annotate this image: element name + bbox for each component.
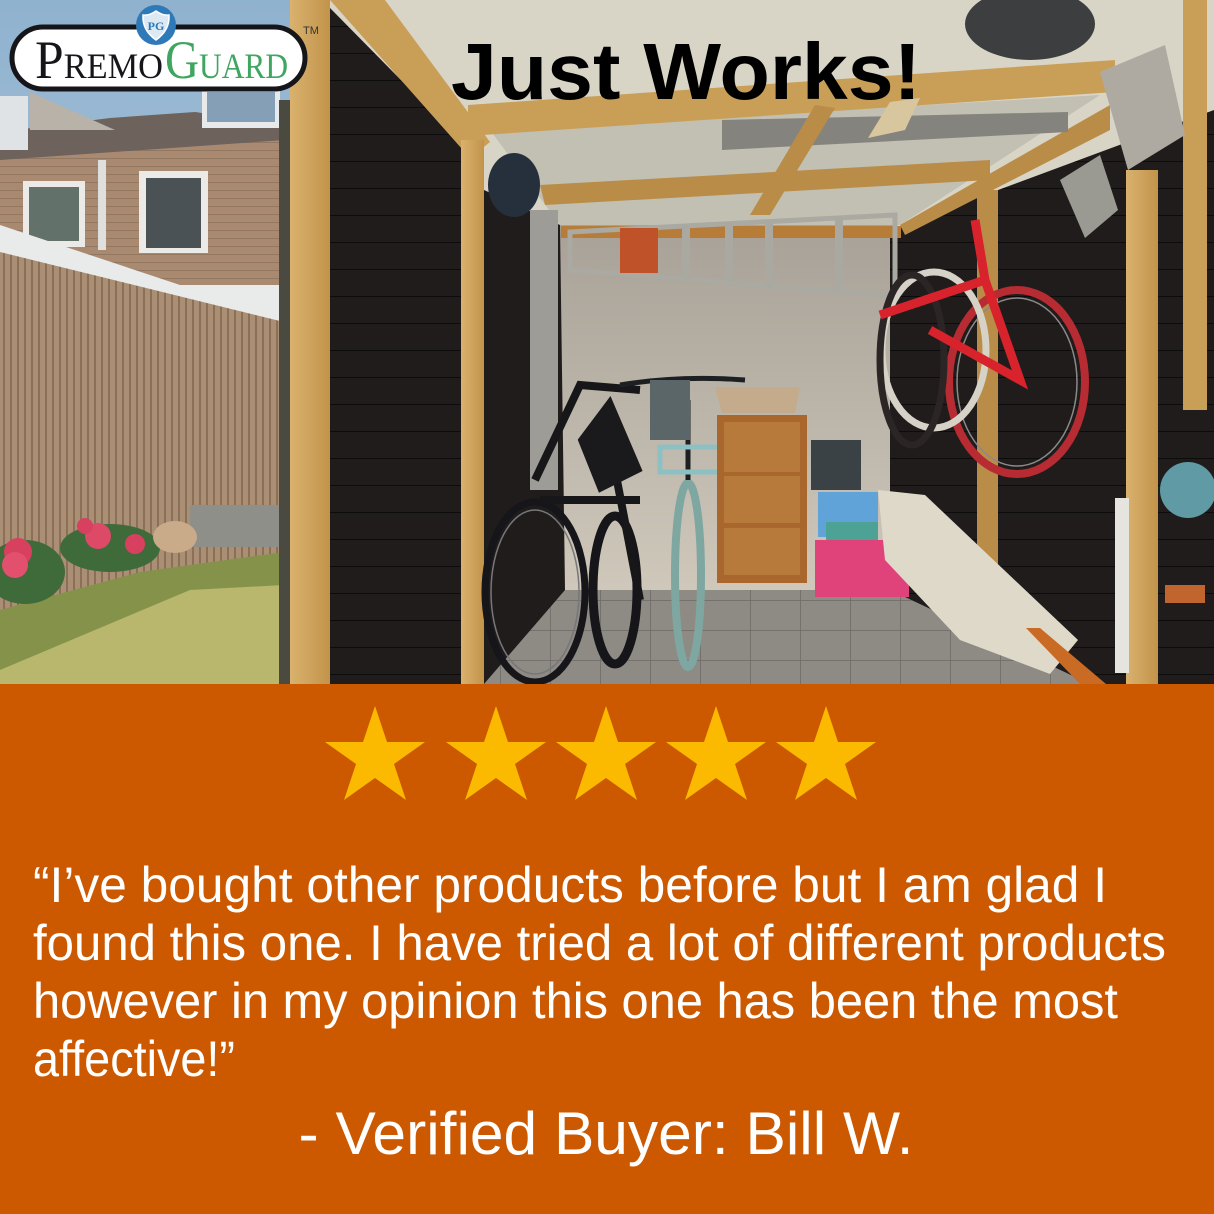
review quote: found this one. I have tried a lot of different products [33,915,1166,971]
logo: PremoGuard: GUARD [165,30,288,90]
icon: PG shield [136,5,176,45]
review attribution: - Verified Buyer: Bill W. [298,1100,914,1167]
bicycles [485,220,1085,682]
drawers and crates [715,387,909,597]
review quote [33,857,1166,1087]
ladder and tools [488,0,1185,490]
review quote: affective!” [33,1031,235,1087]
trademark: TM [303,25,319,37]
shed interior [330,0,1214,684]
logo pill [12,27,305,89]
title: Just Works! [451,27,921,116]
review quote: “I’ve bought other products before but I am glad I [33,857,1107,913]
logo wordmark: PREMO [35,30,163,90]
black plank wall [279,0,490,684]
panel: review [0,684,1214,1214]
wooden beams [468,0,1207,684]
icon: PG shield: PG [148,19,164,33]
rolled umbrella [878,462,1214,684]
photo: bike shed in garden [0,0,1214,684]
logo: PremoGuard [12,5,319,90]
review quote: however in my opinion this one has been the most [33,973,1118,1029]
five star rating [325,706,876,800]
garden background [0,0,290,684]
